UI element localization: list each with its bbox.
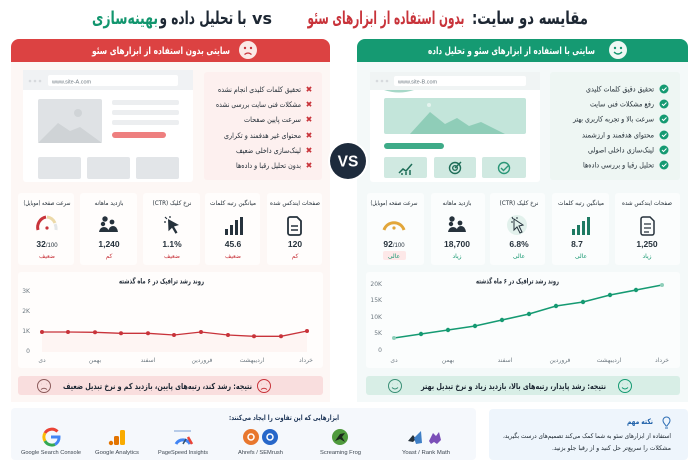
metric: indexed pages good: صفحات ایندکس شده [622, 200, 672, 207]
red header: سایتی بدون استفاده از ابزارهای سئو [91, 46, 230, 57]
tool: PageSpeed Insights: PageSpeed Insights [158, 450, 208, 456]
metric: CTR good: 6.8% [509, 239, 529, 249]
title: با تحلیل داده و [159, 8, 246, 29]
icon: sad face right [258, 380, 270, 392]
metric: indexed pages good [622, 200, 672, 260]
line chart: growing traffic: روند رشد ترافیک در ۶ ماه گذشته [476, 276, 559, 286]
metric: monthly visits [94, 200, 124, 260]
line chart: poor traffic: فروردین [192, 357, 213, 364]
metric: page speed good [370, 200, 418, 260]
tool: Screaming Frog [320, 429, 361, 456]
tool: Google Analytics [95, 430, 139, 456]
metric: page speed good: 92/100 [383, 239, 405, 249]
title: vs [252, 9, 272, 28]
metric: CTR: ضعیف [164, 253, 180, 260]
list: problems: ✖ [306, 161, 313, 170]
metric: page speed: 32/100 [36, 239, 58, 249]
tool: Google Search Console: Google Search Console [21, 450, 81, 456]
panel: tools: ابزارهایی که این تفاوت را ایجاد می‌کنند: [229, 413, 339, 422]
tool: Ahrefs / SEMrush: Ahrefs / SEMrush [238, 450, 283, 456]
metric: page speed good: سرعت صفحه (موبایل) [370, 200, 418, 207]
metric: average rank good: عالی [575, 253, 587, 260]
icon: sad face [239, 41, 257, 59]
metric: page speed good: عالی [388, 253, 400, 260]
line chart: poor traffic: اردیبهشت [240, 357, 265, 364]
tool: PageSpeed Insights [158, 430, 208, 456]
line chart: growing traffic: بهمن [442, 357, 455, 364]
icon: sad face left [38, 380, 50, 392]
line chart: poor traffic: خرداد [299, 357, 313, 364]
panel: site without SEO tools [11, 39, 330, 402]
list: achievements: سرعت بالا و تجربه کاربری بهتر [572, 114, 654, 124]
line chart: growing traffic: 15K [370, 297, 383, 304]
list: problems: مشکلات فنی سایت بررسی نشده [216, 100, 301, 109]
list: problems: سرعت پایین صفحات [244, 115, 301, 124]
list: problems: ✖ [306, 146, 313, 155]
metric: average rank good: میانگین رتبه کلمات [558, 199, 604, 207]
VS badge: VS [338, 154, 358, 170]
panel: important note: مشکلات را سریع‌تر حل کنید و از رقبا جلو بزنید. [552, 444, 671, 452]
line chart: growing traffic: 0 [378, 347, 382, 354]
line chart: poor traffic: روند رشد ترافیک در ۶ ماه گذشته [119, 276, 204, 286]
line chart: growing traffic: دی [390, 357, 398, 364]
metric: indexed pages good: زیاد [642, 253, 652, 260]
metric: CTR: 1.1% [162, 239, 182, 249]
panel: important note: نکته مهم [627, 417, 653, 426]
list: problems: ✖ [306, 100, 313, 109]
metric: average rank: ضعیف [225, 253, 241, 260]
browser mockup: plain site: www.site-A.com [51, 80, 92, 86]
tool: Yoast / Rank Math [402, 431, 450, 456]
list: achievements: تحقیق دقیق کلمات کلیدی [586, 84, 654, 94]
list: achievements: محتوای هدفمند و ارزشمند [582, 130, 654, 140]
result band: poor [18, 376, 323, 395]
line chart: poor traffic [18, 272, 323, 368]
line chart: poor traffic: 0 [26, 348, 30, 355]
line chart: poor traffic: 2K [22, 308, 31, 315]
list: achievements [550, 72, 680, 180]
metric: monthly visits: 1,240 [98, 239, 120, 249]
metric: CTR good [500, 200, 539, 260]
metric: page speed: سرعت صفحه (موبایل) [24, 200, 70, 207]
metric: indexed pages [270, 200, 320, 260]
metric: indexed pages: کم [292, 253, 299, 260]
green header: سایتی با استفاده از ابزارهای سئو و تحلیل داده [428, 46, 595, 57]
tool: Google Search Console [21, 429, 81, 456]
list: problems: لینک‌سازی داخلی ضعیف [236, 146, 301, 155]
line chart: growing traffic: خرداد [655, 357, 669, 364]
panel: important note: استفاده از ابزارهای سئو به شما کمک می‌کند تصمیم‌های درست بگیرید، [503, 432, 671, 440]
metric: average rank [210, 199, 256, 260]
metric: monthly visits good: زیاد [452, 253, 462, 260]
title [92, 8, 588, 29]
browser mockup: plain site [23, 70, 193, 182]
line chart: poor traffic: 3K [22, 288, 31, 295]
metric: monthly visits good: 18,700 [444, 239, 470, 249]
metric: CTR good: نرخ کلیک (CTR) [500, 200, 539, 207]
icon: chart growth [399, 164, 412, 175]
metric cards: good site [367, 193, 680, 265]
icon: happy face left [388, 380, 402, 392]
line chart: poor traffic: دی [38, 357, 46, 364]
line chart: poor traffic: بهمن [89, 357, 102, 364]
metric: indexed pages: صفحات ایندکس شده [270, 200, 320, 207]
metric: monthly visits good [442, 200, 472, 260]
green header [357, 39, 688, 62]
line chart: poor traffic: 1K [22, 328, 31, 335]
list: problems: ✖ [306, 131, 313, 140]
title: بدون استفاده از ابزارهای سئو [307, 8, 464, 29]
VS badge [328, 141, 368, 181]
tool: Google Analytics: Google Analytics [95, 450, 139, 456]
tool: Yoast / Rank Math: Yoast / Rank Math [402, 450, 450, 456]
metric: CTR [152, 200, 192, 260]
line chart: growing traffic: 5K [374, 330, 383, 337]
line chart: growing traffic: 20K [370, 281, 383, 288]
list: problems: ✖ [306, 85, 313, 94]
metric: page speed: ضعیف [39, 253, 55, 260]
line chart: growing traffic: اسفند [498, 357, 513, 364]
result band: good: نتیجه: رشد پایدار، رتبه‌های بالا، بازدید زیاد و نرخ تبدیل بهتر [420, 381, 606, 392]
list: problems: بدون تحلیل رقبا و داده‌ها [236, 161, 301, 170]
panel: tools [11, 408, 476, 460]
list: problems: ✖ [306, 115, 313, 124]
line chart: growing traffic: 10K [370, 314, 383, 321]
list: achievements: تحلیل رقبا و بررسی داده‌ها [583, 160, 654, 170]
metric: indexed pages good: 1,250 [636, 239, 658, 249]
result band: poor: نتیجه: رشد کند، رتبه‌های پایین، بازدید کم و نرخ تبدیل ضعیف [63, 381, 252, 392]
icon: happy face right [618, 380, 632, 392]
metric: CTR good: عالی [513, 253, 525, 260]
icon: happy face [609, 41, 627, 59]
line chart: poor traffic: اسفند [141, 357, 156, 364]
metric: page speed [24, 200, 70, 260]
title: بهینه‌سازی [92, 8, 158, 29]
list: problems: تحقیق کلمات کلیدی انجام نشده [218, 85, 301, 94]
icon: check circle [498, 162, 510, 174]
metric: average rank good: 8.7 [571, 239, 583, 249]
metric: monthly visits good: بازدید ماهانه [442, 200, 472, 207]
tool: Ahrefs / SEMrush [238, 429, 283, 456]
metric: CTR: نرخ کلیک (CTR) [152, 200, 192, 207]
line chart: growing traffic: اردیبهشت [597, 357, 622, 364]
tool: Screaming Frog: Screaming Frog [320, 450, 361, 456]
metric: average rank: میانگین رتبه کلمات [210, 199, 256, 207]
line chart: growing traffic [366, 272, 680, 368]
result band: good [366, 376, 680, 395]
panel: important note [489, 409, 688, 460]
line chart: growing traffic: فروردین [550, 357, 571, 364]
metric: average rank good [558, 199, 604, 260]
title: مقایسه دو سایت: [472, 8, 588, 29]
red header [11, 39, 330, 62]
list: problems: محتوای غیر هدفمند و تکراری [224, 131, 301, 140]
icon: target [450, 162, 461, 174]
list: problems [204, 72, 322, 180]
metric: monthly visits: کم [106, 253, 113, 260]
icon: light bulb [663, 417, 670, 428]
panel: site with SEO tools [357, 39, 688, 402]
metric: average rank: 45.6 [225, 239, 242, 249]
metric cards: poor site [18, 193, 322, 265]
browser mockup: optimized site: www.site-B.com [397, 80, 438, 86]
metric: indexed pages: 120 [288, 239, 302, 249]
metric: monthly visits: بازدید ماهانه [94, 200, 124, 207]
list: achievements: رفع مشکلات فنی سایت [590, 100, 654, 108]
list: achievements: لینک‌سازی داخلی اصولی [588, 146, 654, 154]
browser mockup: optimized site [370, 72, 540, 182]
